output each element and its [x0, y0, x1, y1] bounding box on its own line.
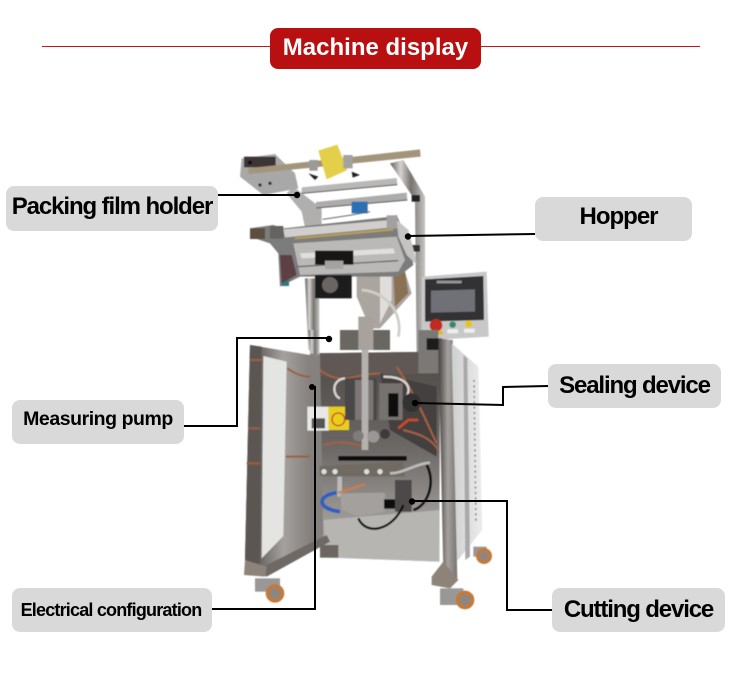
connector: cutting device — [409, 498, 552, 610]
label: Electrical configuration: Electrical configuration — [21, 600, 201, 620]
connector: measuring pump — [184, 336, 332, 426]
machine lower section — [244, 330, 492, 609]
label: Packing film holder — [6, 186, 218, 231]
label: Cutting device: Cutting device — [564, 596, 713, 623]
machine upper section — [240, 145, 489, 353]
label: Electrical configuration — [12, 588, 212, 632]
label: Hopper: Hopper — [580, 203, 658, 230]
label: Packing film holder: Packing film holder — [12, 192, 212, 220]
connector: sealing device — [412, 386, 548, 406]
control panel — [422, 272, 489, 341]
label: Measuring pump: Measuring pump — [23, 408, 173, 430]
sealing device — [334, 350, 421, 450]
label: Sealing device — [548, 364, 721, 408]
wheels — [255, 545, 492, 609]
label: Cutting device — [552, 588, 725, 632]
label: Sealing device: Sealing device — [559, 372, 710, 399]
connector: electrical configuration — [212, 384, 315, 609]
label: Hopper — [535, 197, 692, 241]
heading: Machine display — [270, 28, 481, 69]
left door — [245, 345, 322, 570]
yellow warning label — [307, 407, 349, 431]
cutting device — [319, 456, 431, 529]
label: Measuring pump — [12, 400, 184, 444]
heading: Machine display: Machine display — [283, 34, 468, 61]
connector: packing film holder — [218, 192, 300, 198]
right panel — [452, 343, 482, 562]
connector: hopper — [405, 233, 535, 240]
